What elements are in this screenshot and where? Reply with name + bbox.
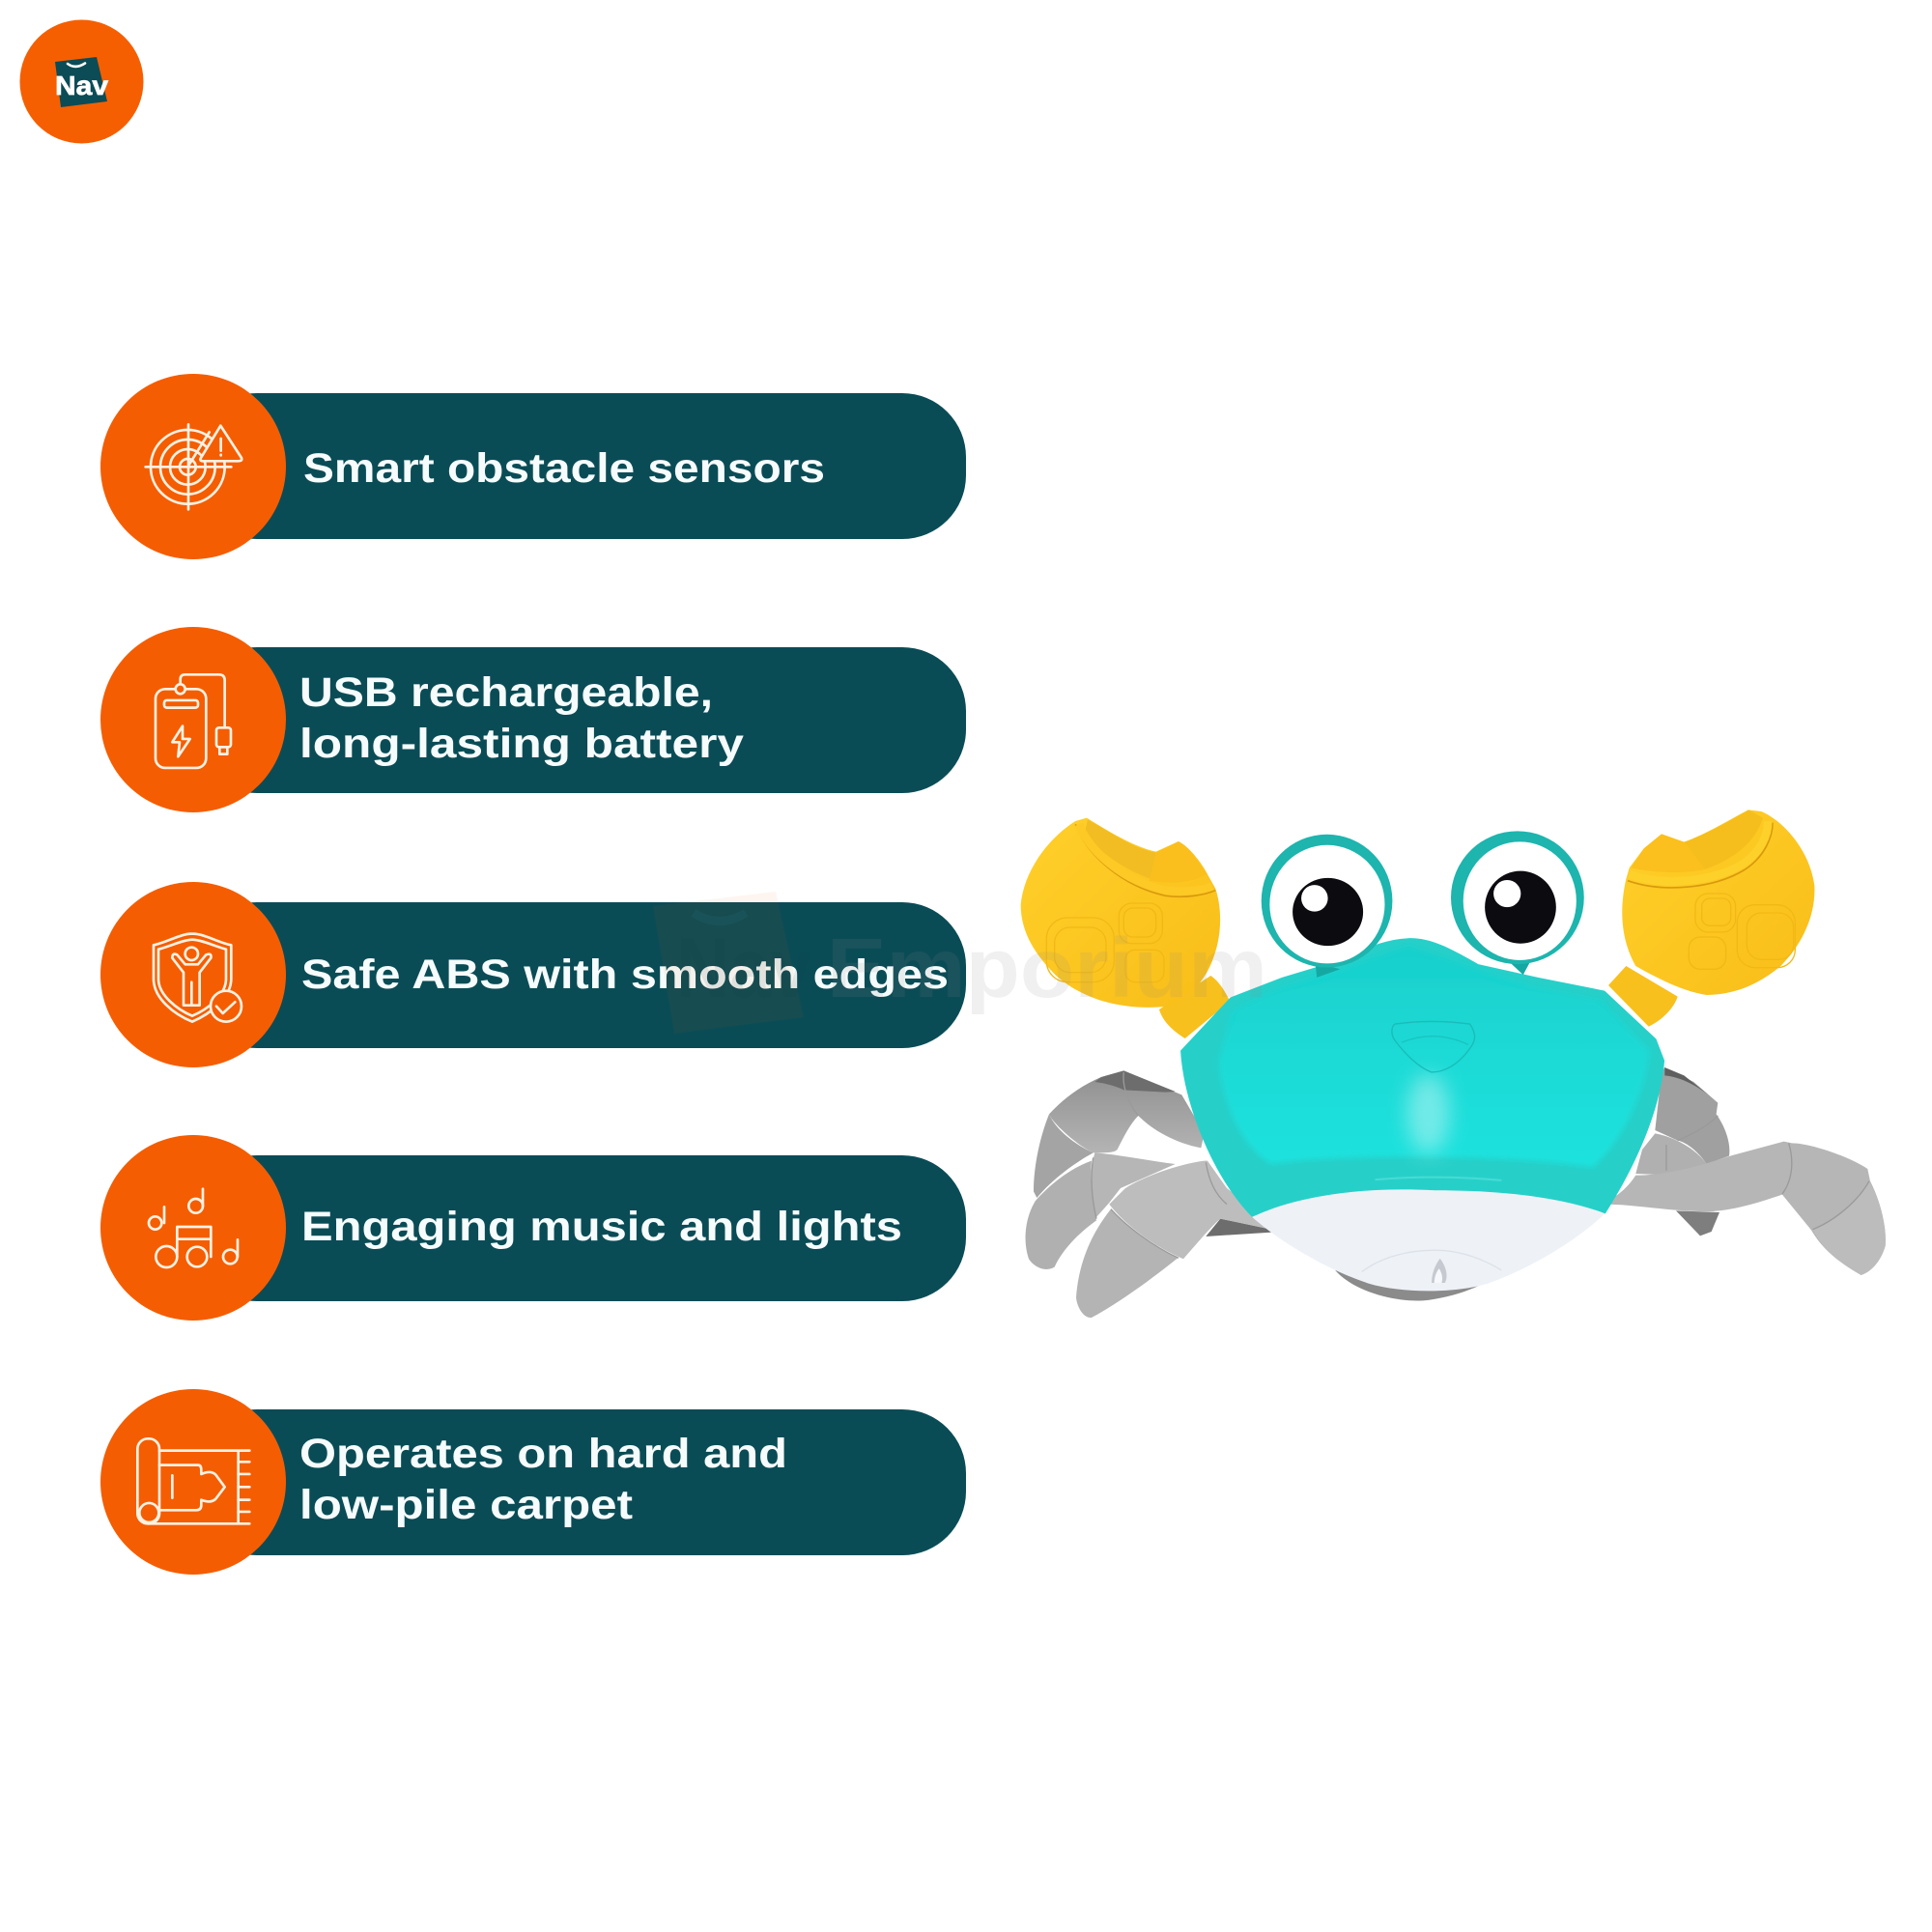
- logo badge: [19, 19, 143, 143]
- feature row: USB rechargeable battery: [100, 627, 966, 812]
- crab right legs: [1604, 1067, 1886, 1275]
- watermark: Nav Emporium: Emporium: [827, 922, 1267, 1015]
- crab white belly: [1252, 1189, 1605, 1291]
- left claw: [1021, 818, 1230, 1038]
- right claw: [1608, 810, 1814, 1027]
- feature row: smart obstacle sensors: Smart obstacle sensors: [303, 445, 825, 492]
- feature row: music and lights: Engaging music and lights: [301, 1204, 902, 1250]
- feature row: safe ABS: [100, 882, 966, 1067]
- watermark: Nav Emporium: [653, 892, 1267, 1034]
- crab teal shell: [1180, 938, 1664, 1217]
- logo badge: Nav: [55, 71, 108, 100]
- feature row: safe ABS: Safe ABS with smooth edges: [301, 952, 949, 998]
- feature row: USB rechargeable battery: USB rechargeable,: [299, 669, 713, 716]
- left eye: [1262, 835, 1392, 978]
- feature row: smart obstacle sensors: [100, 374, 966, 559]
- watermark: Nav Emporium: Nav: [676, 922, 811, 1015]
- right eye: [1451, 831, 1584, 975]
- feature row: USB rechargeable battery: long-lasting battery: [299, 721, 744, 767]
- crab toy illustration: [1021, 810, 1886, 1318]
- crab wheel: [1335, 1270, 1496, 1301]
- feature row: hard floor and carpet: low-pile carpet: [299, 1482, 633, 1528]
- crab left legs: [1026, 1070, 1282, 1318]
- feature row: music and lights: [100, 1135, 966, 1321]
- feature row: hard floor and carpet: Operates on hard and: [299, 1431, 787, 1477]
- feature row: hard floor and carpet: [100, 1389, 966, 1575]
